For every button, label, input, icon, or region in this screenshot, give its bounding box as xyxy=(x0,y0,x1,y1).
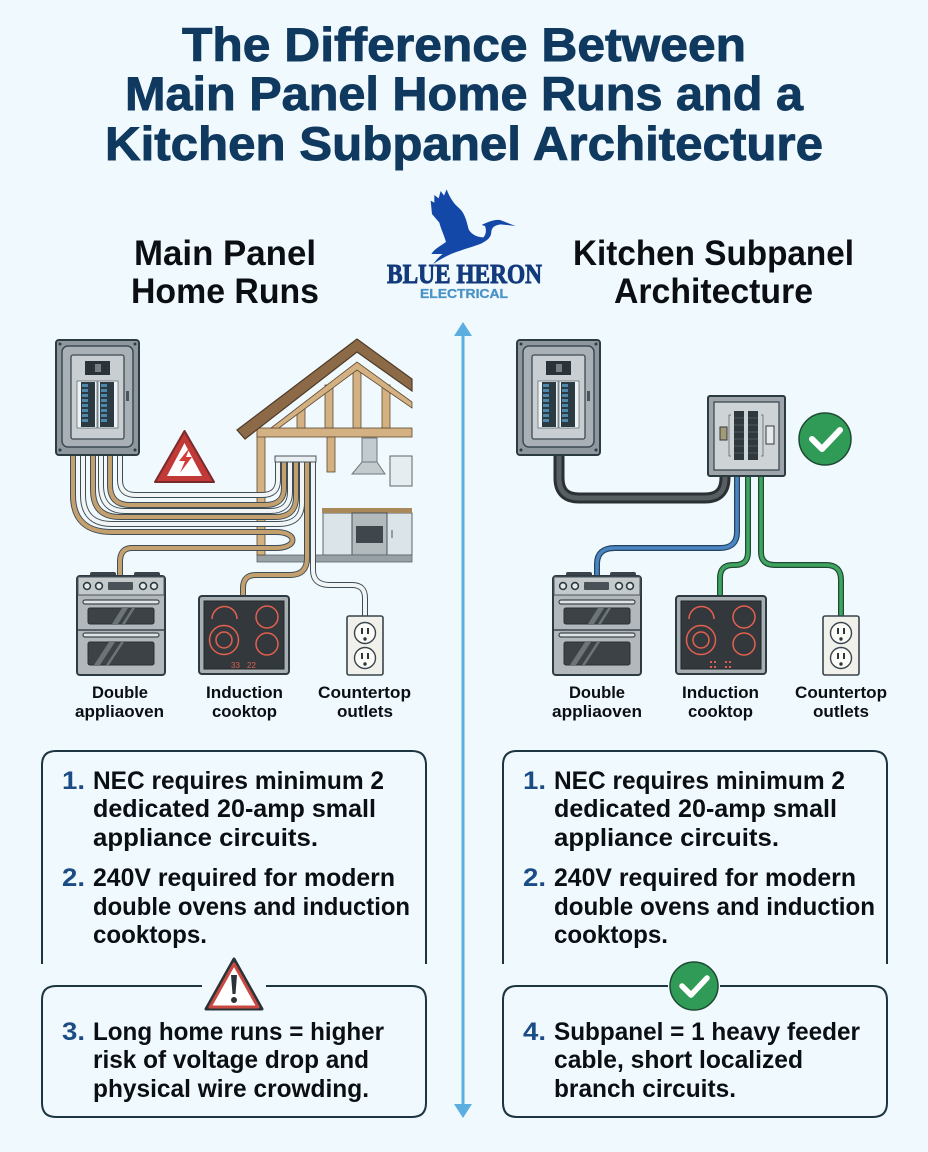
branch circuits right xyxy=(597,476,841,616)
panel: left risk callout: physical wire crowding. xyxy=(93,1075,369,1103)
panel: left requirements: 1. xyxy=(62,767,85,795)
panel: right benefit callout xyxy=(503,986,887,1117)
panel: left risk callout: Long home runs = higher xyxy=(93,1018,384,1046)
title: Kitchen Subpanel Architecture xyxy=(105,117,823,170)
title: The Difference Between xyxy=(182,18,746,71)
panel: right requirements: 2. xyxy=(523,864,546,892)
appliance: double oven right xyxy=(553,572,641,675)
icon: warning triangle xyxy=(206,959,262,1009)
floor xyxy=(257,555,412,562)
panel: left risk callout: 3. xyxy=(62,1018,85,1046)
appliance labels left: outlets xyxy=(337,702,393,721)
heading: kitchen subpanel architecture: Kitchen Subpanel xyxy=(573,234,854,273)
appliance labels right: appliaoven xyxy=(552,702,642,721)
appliance labels left: appliaoven xyxy=(75,702,164,721)
panel: right requirements xyxy=(503,751,887,964)
appliance labels right xyxy=(552,683,887,721)
heading: main panel home runs: Home Runs xyxy=(131,272,319,311)
icon: green check xyxy=(799,413,851,465)
panel: right requirements: NEC requires minimum 2 xyxy=(554,767,845,795)
panel: right benefit callout: 4. xyxy=(523,1018,546,1046)
heading: main panel home runs xyxy=(131,234,319,311)
icon: green check badge xyxy=(670,962,718,1010)
panel: right requirements: dedicated 20-amp small xyxy=(554,795,837,823)
appliance labels right: outlets xyxy=(813,702,869,721)
kitchen hood xyxy=(352,438,385,474)
heavy feeder cable xyxy=(559,456,725,498)
junction bar xyxy=(275,456,316,462)
appliance labels right: Countertop xyxy=(795,683,887,702)
panel: left requirements: dedicated 20-amp small xyxy=(93,795,376,823)
counter and base cabinets xyxy=(322,508,412,555)
appliance: induction cooktop left: 33 xyxy=(231,661,240,670)
panel: left risk callout xyxy=(42,986,426,1117)
icon: electrical hazard warning xyxy=(155,431,214,482)
panel: left requirements: appliance circuits. xyxy=(93,824,318,852)
appliance: outlets right xyxy=(823,616,859,675)
wall cabinet xyxy=(390,456,412,486)
title xyxy=(105,18,823,170)
appliance: double oven left xyxy=(77,572,165,675)
panel: left requirements: cooktops. xyxy=(93,921,207,949)
panel: right benefit callout: cable, short localized xyxy=(554,1046,803,1074)
panel: left requirements: 2. xyxy=(62,864,85,892)
logo: blue heron electrical: BLUE HERON xyxy=(387,259,542,289)
appliance labels left: cooktop xyxy=(212,702,277,721)
heading: kitchen subpanel architecture xyxy=(573,234,854,311)
center double arrow xyxy=(454,322,472,1118)
panel: right requirements: 240V required for modern xyxy=(554,864,856,892)
house framing xyxy=(237,339,412,562)
panel: right benefit callout: Subpanel = 1 heavy feeder xyxy=(554,1018,860,1046)
appliance labels right: Double xyxy=(569,683,625,702)
panel: left requirements: double ovens and induction xyxy=(93,893,410,921)
appliance labels right: Induction xyxy=(682,683,759,702)
appliance: induction cooktop left: 22 xyxy=(247,661,256,670)
panel: right requirements: cooktops. xyxy=(554,921,668,949)
logo: blue heron electrical xyxy=(387,189,542,301)
appliance: induction cooktop right xyxy=(676,596,766,674)
title: Main Panel Home Runs and a xyxy=(125,67,804,120)
appliance labels left: Countertop xyxy=(318,683,411,702)
appliance: induction cooktop left xyxy=(199,596,289,674)
appliance labels right: cooktop xyxy=(688,702,753,721)
panel: left requirements: NEC requires minimum 2 xyxy=(93,767,384,795)
logo: blue heron electrical: ELECTRICAL xyxy=(420,286,508,301)
heading: kitchen subpanel architecture: Architecture xyxy=(614,272,813,311)
appliance labels left: Induction xyxy=(206,683,283,702)
roof xyxy=(237,339,412,439)
studs xyxy=(257,362,412,555)
panel: left requirements xyxy=(42,751,426,964)
main panel right xyxy=(517,340,600,455)
appliance labels left xyxy=(75,683,411,721)
appliance labels left: Double xyxy=(92,683,148,702)
panel: left risk callout: risk of voltage drop and xyxy=(93,1046,369,1074)
home run wire bundle xyxy=(73,456,365,616)
kitchen subpanel xyxy=(708,396,785,476)
panel: right requirements: 1. xyxy=(523,767,546,795)
panel: right requirements: appliance circuits. xyxy=(554,824,779,852)
appliance: outlets left xyxy=(347,616,383,675)
panel: left requirements: 240V required for modern xyxy=(93,864,395,892)
heading: main panel home runs: Main Panel xyxy=(134,234,316,273)
main panel left xyxy=(56,340,139,455)
icon: heron xyxy=(431,189,516,264)
panel: right requirements: double ovens and induction xyxy=(554,893,875,921)
panel: right benefit callout: branch circuits. xyxy=(554,1075,736,1103)
